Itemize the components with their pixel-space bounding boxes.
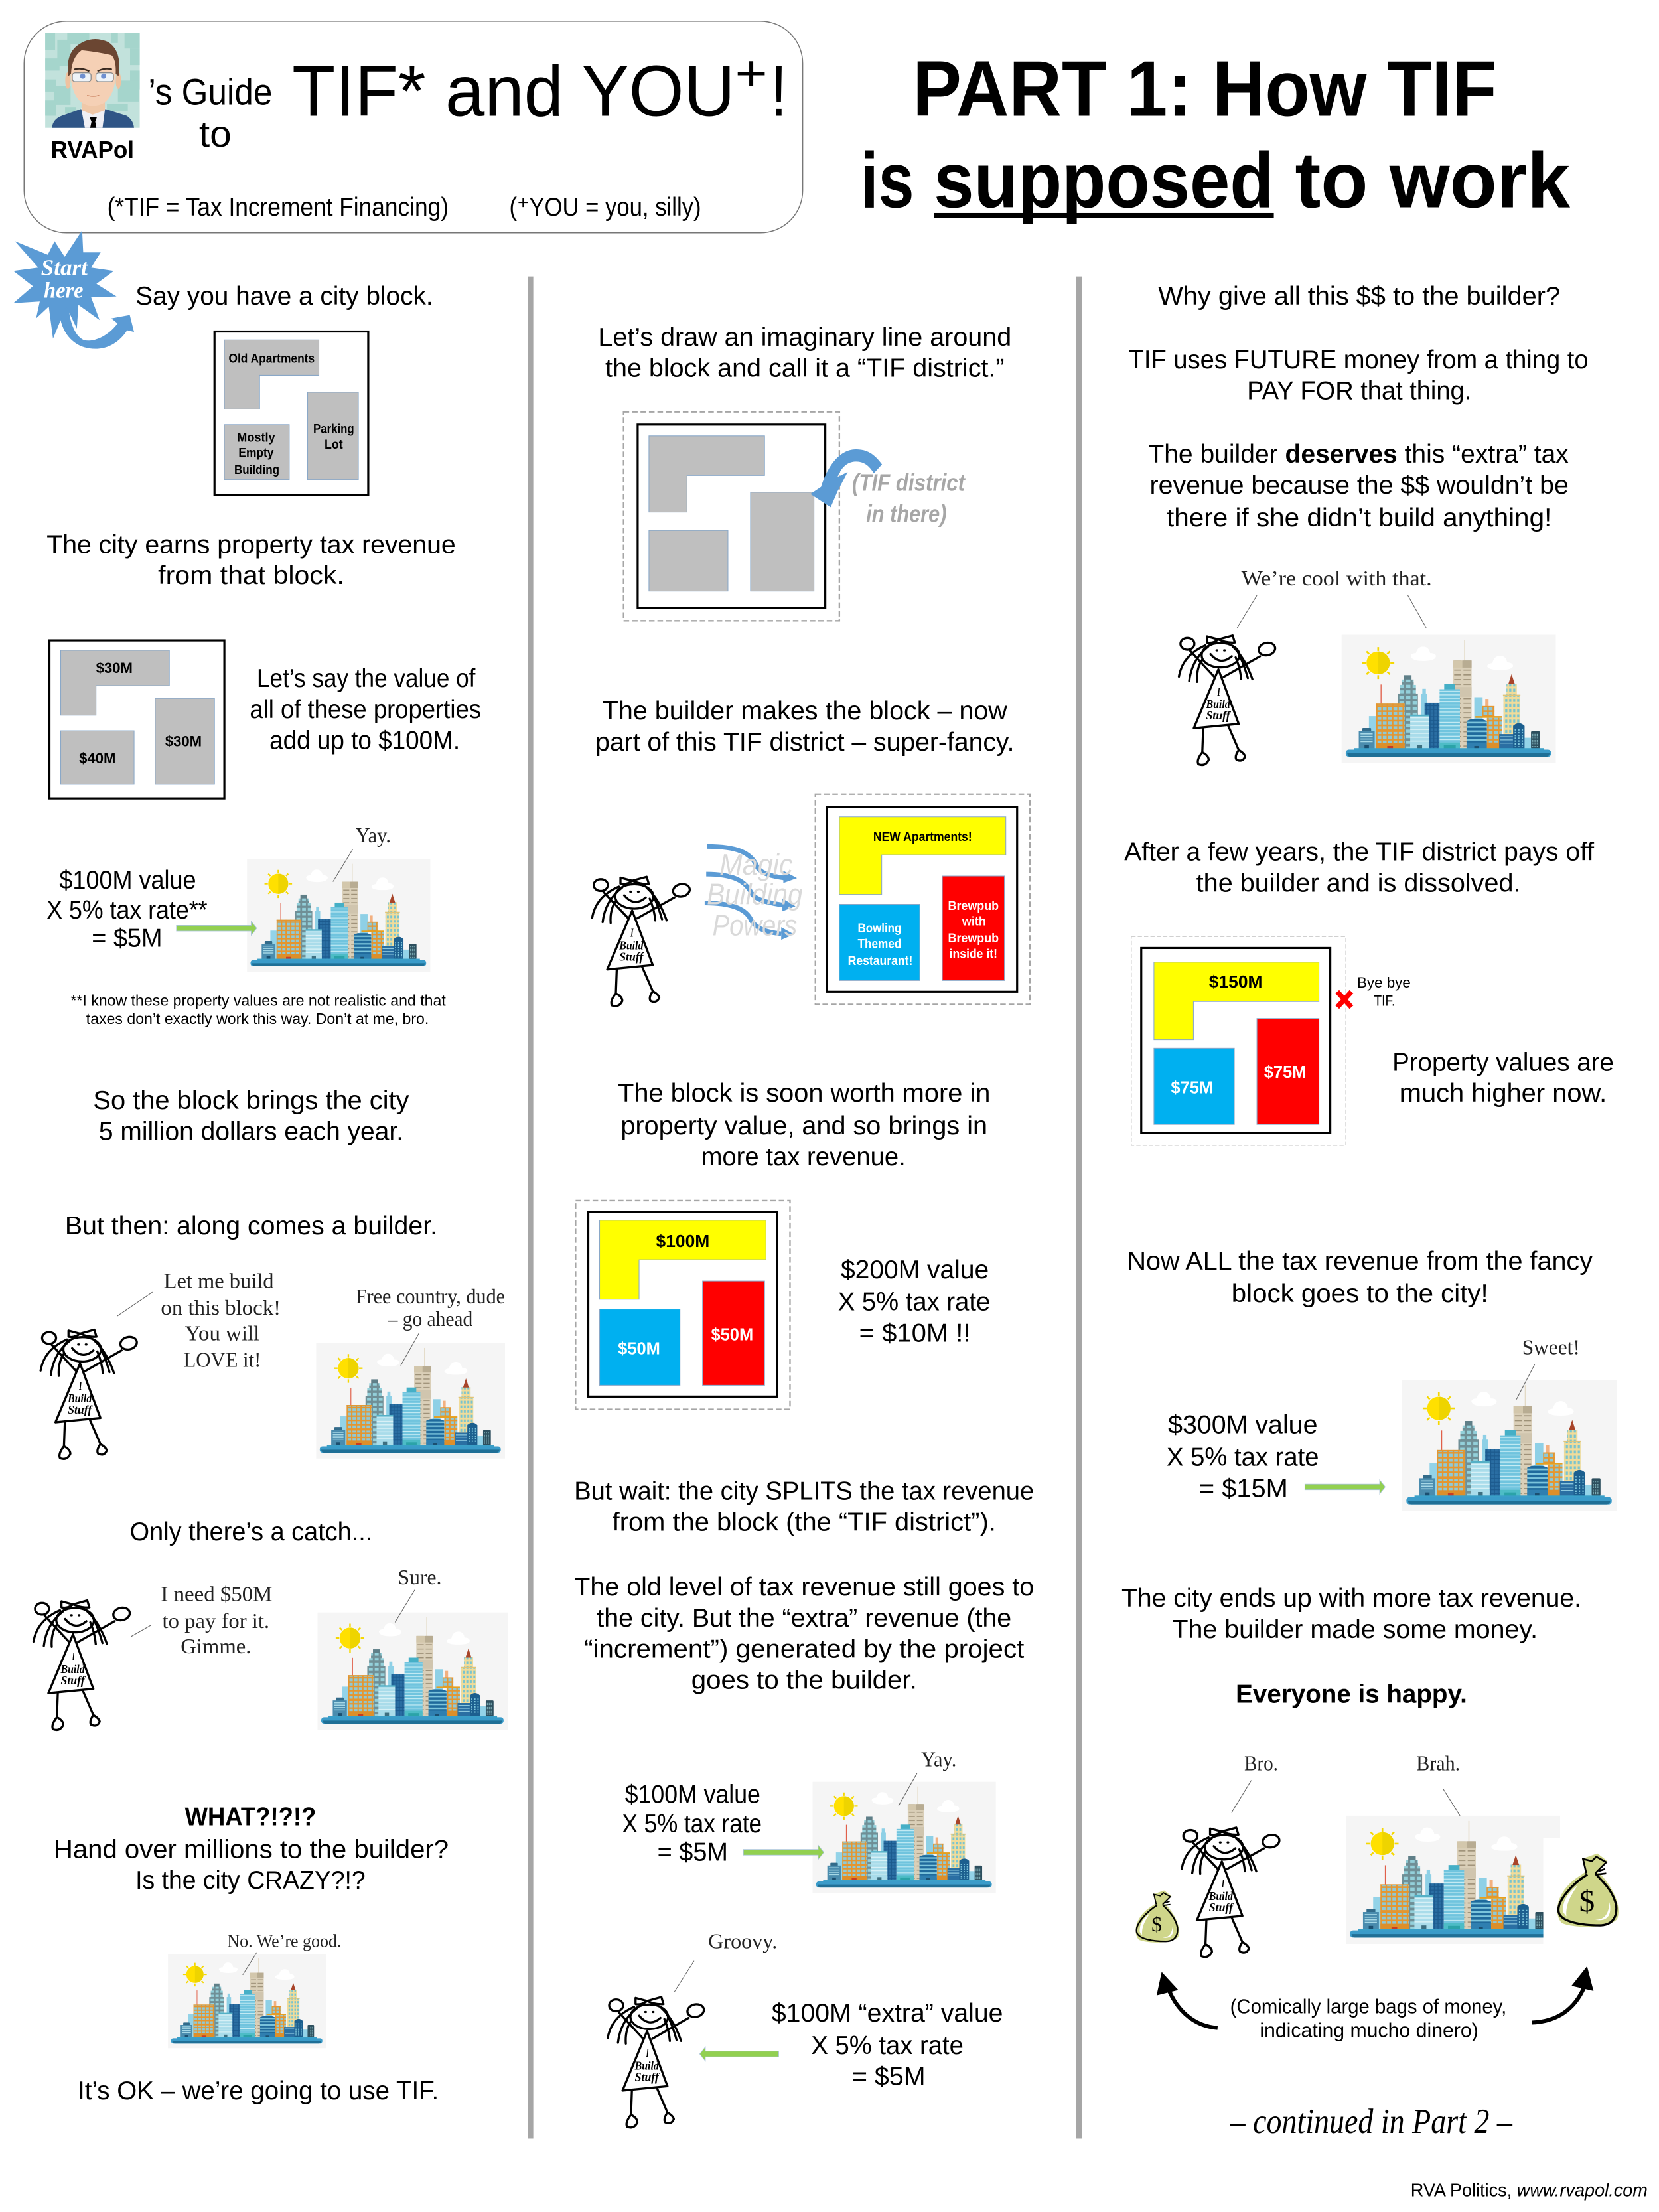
speech pointer: free country <box>401 1333 419 1366</box>
text: worth more: property value, and so brings in <box>620 1111 987 1140</box>
title: Part 1 <box>861 44 1571 224</box>
title: TIF and YOU: ! <box>770 50 787 131</box>
diagram: fancy block: inside it! <box>950 947 997 961</box>
title: Part 1: supposed <box>934 136 1274 224</box>
diagram: block with values <box>50 640 224 798</box>
text: all tax revenue <box>1127 1246 1593 1308</box>
text: super fancy <box>595 696 1014 757</box>
text: deserves: there if she didn’t build anything! <box>1167 503 1551 532</box>
footnote: taxes don’t exactly work this way. Don’t at me, bro. <box>86 1010 429 1027</box>
text: ends up: The city ends up with more tax revenue. <box>1121 1584 1581 1613</box>
diagram: fancy block: NEW Apartments! <box>873 830 972 844</box>
diagram: block with 200M values <box>575 1201 790 1410</box>
icon: city with Yay <box>247 824 430 972</box>
icon: start here starburst: Start <box>41 256 89 280</box>
diagram: labelled city block: Empty <box>238 447 274 461</box>
header panel: title box <box>24 21 803 233</box>
text: higher now: much higher now. <box>1400 1078 1607 1108</box>
text: 5 million <box>93 1086 409 1146</box>
arrow: curved left to small bag <box>1157 1972 1218 2028</box>
text: higher now: Property values are <box>1392 1047 1614 1076</box>
text: pays off: After a few years, the TIF district pays off <box>1124 838 1594 867</box>
text: future money: PAY FOR that thing. <box>1247 376 1471 406</box>
icon: city last <box>1346 1816 1561 1945</box>
text: ends up: The builder made some money. <box>1173 1615 1538 1644</box>
text: calculation 5M: $100M value <box>59 865 196 895</box>
text: calculation 15M: $300M value <box>1168 1410 1317 1439</box>
heading: guide to <box>148 71 272 155</box>
icon: builder 3: I <box>630 926 634 939</box>
text: pays off: the builder and is dissolved. <box>1196 868 1521 897</box>
text: catch: Only there’s a catch... <box>130 1517 372 1546</box>
icon: builder 3: Stuff <box>619 950 644 964</box>
icon: builder 5: I <box>1221 1877 1225 1890</box>
icon: red x <box>1337 992 1351 1007</box>
text: definitions <box>108 192 701 222</box>
text: value adds up: add up to $100M. <box>269 726 460 755</box>
label: TIF district in there <box>852 469 966 527</box>
text: increment explanation: “increment”) generated by the project <box>584 1635 1024 1664</box>
diagram: fancy block <box>816 794 1030 1004</box>
icon: city <box>316 1343 505 1459</box>
text: future money: TIF uses FUTURE money from a thing to <box>1129 345 1589 374</box>
icon: city with Yay: Yay. <box>921 1747 956 1771</box>
icon: large money bag <box>1557 1854 1619 1927</box>
diagram: labelled city block: Parking <box>313 423 354 437</box>
diagram: labelled city block <box>214 332 368 495</box>
diagram: block with values: $40M <box>79 750 115 767</box>
title: TIF and YOU: TIF* and YOU <box>292 50 735 131</box>
text: use tif: It’s OK – we’re going to use TIF. <box>78 2076 439 2105</box>
text: imaginary line <box>598 323 1011 383</box>
arrow: curved right to large bag <box>1532 1966 1593 2023</box>
icon: builder 3 <box>592 877 693 1006</box>
text: calculation 10M: = $10M !! <box>859 1318 971 1347</box>
speech: need 50M: to pay for it. <box>163 1609 269 1633</box>
text: calculation 10M: X 5% tax rate <box>838 1288 990 1317</box>
icon: builder 5: Stuff <box>1209 1901 1234 1914</box>
text: calculation 15M: = $15M <box>1199 1473 1288 1503</box>
diagram: fancy block: Bowling <box>858 922 901 936</box>
icon: builder 1 <box>40 1330 140 1459</box>
text: ends up <box>1121 1584 1581 1644</box>
icon: city with sweet: Sweet! <box>1522 1336 1580 1359</box>
label: TIF district in there: (TIF district <box>852 469 966 496</box>
speech: bro brah: Bro. <box>1244 1752 1278 1775</box>
speech: free country <box>356 1285 505 1331</box>
text: deserves: revenue because the $$ wouldn’t be <box>1150 471 1569 500</box>
text: value adds up: all of these properties <box>250 695 481 724</box>
icon: large money bag: $ <box>1579 1884 1595 1919</box>
title: Part 1: PART 1: How TIF <box>912 44 1496 133</box>
icon: small money bag: $ <box>1151 1913 1162 1936</box>
text: increment explanation <box>574 1572 1034 1694</box>
text: all tax revenue: block goes to the city! <box>1232 1279 1488 1308</box>
diagram: fancy block: with <box>962 915 986 928</box>
diagram: dissolved block <box>1131 936 1346 1145</box>
text: deserves: The builder deserves this “extra” tax <box>1148 439 1569 469</box>
text: calculation 10M: $200M value <box>841 1255 989 1284</box>
diagram: block with 200M values: $50M <box>711 1325 753 1344</box>
label: magic building powers <box>707 849 803 942</box>
text: calculation old level: = $5M <box>658 1838 728 1867</box>
speech: bro brah <box>1232 1752 1465 1822</box>
title: Part 1: is <box>861 136 914 224</box>
icon: builder 5: Build <box>1208 1889 1234 1903</box>
text: increment explanation: The old level of tax revenue still goes to <box>574 1572 1034 1601</box>
text: increment explanation: the city. But the “extra” revenue (the <box>597 1603 1011 1633</box>
text: city splits: from the block (the “TIF district”). <box>613 1507 996 1536</box>
speech: sure: Sure. <box>398 1566 441 1589</box>
speech: cool with that <box>1237 567 1432 628</box>
diagram: fancy block: Restaurant! <box>848 954 912 968</box>
text: future money <box>1129 345 1589 406</box>
icon: builder 4: I <box>1217 685 1220 698</box>
icon: city with Yay <box>812 1747 996 1893</box>
icon: city <box>317 1613 508 1730</box>
icon: builder groovy: I <box>646 2046 650 2059</box>
diagram: fancy block: Brewpub <box>948 932 999 946</box>
text: 5 million: 5 million dollars each year. <box>99 1117 403 1146</box>
label: bye bye TIF: TIF. <box>1374 993 1395 1009</box>
icon: start here starburst: here <box>44 279 84 303</box>
icon: builder 4: Build <box>1206 698 1231 711</box>
text: calculation old level: $100M value <box>625 1780 760 1809</box>
icon: builder 3: Build <box>618 939 644 952</box>
diagram: dissolved block: $75M <box>1171 1078 1213 1097</box>
icon: builder groovy: Build <box>634 2059 660 2072</box>
text: calculation extra: $100M “extra” value <box>772 1998 1003 2028</box>
icon: builder 2: Stuff <box>61 1674 86 1687</box>
text: definitions: (*TIF = Tax Increment Financing) <box>108 192 449 222</box>
text: calculation extra: = $5M <box>852 2062 926 2091</box>
diagram: labelled city block: Old Apartments <box>228 352 315 366</box>
diagram: fancy block: Brewpub <box>948 899 999 913</box>
text: calculation extra <box>772 1998 1003 2091</box>
icon: city with no we're good: No. We’re good. <box>227 1930 342 1951</box>
text: why give: Why give all this $$ to the builder? <box>1158 281 1560 311</box>
diagram: block with 200M values: $100M <box>656 1232 709 1251</box>
text: city splits: But wait: the city SPLITS the tax revenue <box>574 1477 1034 1506</box>
text: what: WHAT?!?!? <box>185 1803 316 1832</box>
icon: builder 4: Stuff <box>1206 709 1232 722</box>
icon: builder 5 <box>1182 1828 1283 1957</box>
text: city earns tax <box>46 530 456 590</box>
icon: city with no we're good <box>168 1930 342 2048</box>
text: 5 million: So the block brings the city <box>93 1086 409 1115</box>
title: TIF and YOU: + <box>735 45 767 102</box>
text: increment explanation: goes to the builder. <box>691 1665 917 1694</box>
arrow: green to builder <box>699 2047 778 2061</box>
text: deserves <box>1148 439 1569 532</box>
speech: builder let me build: LOVE it! <box>183 1349 261 1372</box>
column dividers <box>528 277 1082 2138</box>
speech: builder let me build <box>117 1270 281 1372</box>
credit: RVA Politics, www.rvapol.com <box>1411 2180 1648 2201</box>
text: comically large: (Comically large bags of money, <box>1230 1994 1506 2018</box>
text: higher now <box>1392 1047 1614 1108</box>
text: worth more: The block is soon worth more in <box>618 1078 990 1108</box>
arrow: green to city <box>1305 1480 1386 1494</box>
icon: builder groovy <box>608 1930 777 2128</box>
text: all tax revenue: Now ALL the tax revenue from the fancy <box>1127 1246 1593 1276</box>
speech: free country: – go ahead <box>388 1307 472 1331</box>
text: what: Is the city CRAZY?!? <box>135 1866 366 1895</box>
text: builder arrives: But then: along comes a builder. <box>65 1211 437 1240</box>
text: calculation old level <box>622 1780 762 1867</box>
diagram: labelled city block: Mostly <box>237 431 275 445</box>
text: calculation 15M <box>1167 1410 1319 1503</box>
label: magic building powers: Powers <box>713 909 797 942</box>
diagram: labelled city block: Building <box>234 463 279 477</box>
icon: start here starburst <box>13 230 134 349</box>
arrow: green to city <box>177 921 257 935</box>
text: worth more <box>618 1078 990 1171</box>
text: calculation 5M: X 5% tax rate** <box>46 895 208 924</box>
heading: guide to: to <box>199 113 232 155</box>
icon: builder 2 <box>34 1601 133 1730</box>
text: what <box>54 1803 449 1895</box>
label: magic building powers: Magic <box>719 849 793 881</box>
text: calculation 15M: X 5% tax rate <box>1167 1443 1319 1472</box>
text: continued: – continued in Part 2 – <box>1230 2102 1512 2141</box>
icon: builder groovy: Groovy. <box>708 1930 777 1953</box>
text: city earns tax: The city earns property tax revenue <box>46 530 456 559</box>
diagram: block with values: $30M <box>96 660 133 676</box>
footnote <box>70 992 446 1027</box>
icon: builder 1: I <box>79 1379 82 1392</box>
icon: builder 4 <box>1179 636 1278 765</box>
arrow: green to city <box>743 1845 824 1860</box>
text: imaginary line: Let’s draw an imaginary line around <box>598 323 1011 352</box>
speech: cool with that: We’re cool with that. <box>1242 567 1432 590</box>
title: Part 1: to work <box>1295 136 1571 224</box>
label: bye bye TIF: Bye bye <box>1357 974 1411 991</box>
icon: builder 1: Stuff <box>68 1403 93 1416</box>
speech: need 50M: I need $50M <box>161 1583 272 1606</box>
speech: builder let me build: Let me build <box>164 1270 274 1293</box>
diagram: dissolved block: $150M <box>1209 973 1263 992</box>
icon: builder 2: I <box>72 1650 75 1663</box>
icon: city with Yay: Yay. <box>356 824 391 847</box>
text: what: Hand over millions to the builder? <box>54 1834 449 1864</box>
text: everyone happy: Everyone is happy. <box>1236 1680 1467 1709</box>
icon: builder groovy: Stuff <box>635 2070 660 2083</box>
text: calculation 5M <box>46 865 208 952</box>
diagram: block with 200M values: $50M <box>618 1340 660 1359</box>
diagram: block with values: $30M <box>165 733 202 749</box>
diagram: TIF district block <box>624 412 839 621</box>
icon: builder 1: Build <box>67 1392 92 1405</box>
speech: free country: Free country, dude <box>356 1285 505 1308</box>
icon: city <box>1342 635 1556 763</box>
text: comically large: indicating mucho dinero) <box>1260 2018 1479 2041</box>
speech: bro brah: Brah. <box>1416 1752 1460 1775</box>
text: value adds up: Let’s say the value of <box>257 664 476 693</box>
diagram: dissolved block: $75M <box>1264 1063 1306 1082</box>
text: super fancy: The builder makes the block – now <box>603 696 1007 725</box>
text: pays off <box>1124 838 1594 897</box>
speech: need 50M <box>131 1583 272 1658</box>
text: super fancy: part of this TIF district – super-fancy. <box>595 727 1014 757</box>
label: magic building powers: Building <box>707 879 803 911</box>
text: calculation 10M <box>838 1255 990 1347</box>
text: calculation extra: X 5% tax rate <box>811 2031 964 2060</box>
text: city earns tax: from that block. <box>158 561 344 590</box>
icon: builder 2: Build <box>60 1662 86 1676</box>
label: TIF district in there: in there) <box>866 500 946 527</box>
speech: builder let me build: on this block! <box>161 1296 281 1319</box>
icon: avatar <box>45 33 140 128</box>
text: value adds up <box>250 664 481 755</box>
speech: sure <box>395 1566 441 1622</box>
arrows: magic building powers <box>705 846 797 940</box>
speech: builder let me build: You will <box>185 1321 259 1345</box>
text: say you have a city block: Say you have a city block. <box>135 281 433 311</box>
icon: small money bag <box>1135 1890 1179 1943</box>
text: imaginary line: the block and call it a “TIF district.” <box>605 354 1005 383</box>
text: comically large <box>1230 1994 1506 2041</box>
diagram: labelled city block: Lot <box>325 438 343 452</box>
text: calculation 5M: = $5M <box>92 923 163 952</box>
speech: need 50M: Gimme. <box>180 1635 251 1658</box>
footnote: **I know these property values are not realistic and that <box>70 992 446 1009</box>
text: calculation old level: X 5% tax rate <box>622 1809 762 1838</box>
label: bye bye TIF <box>1357 974 1411 1009</box>
text: city splits <box>574 1477 1034 1536</box>
text: worth more: more tax revenue. <box>701 1142 906 1171</box>
arrow: TIF district pointer <box>810 449 882 507</box>
heading: guide to: ’s Guide <box>148 71 272 112</box>
text: definitions: (⁺YOU = you, silly) <box>509 192 701 222</box>
icon: city with sweet <box>1402 1336 1617 1511</box>
diagram: fancy block: Themed <box>858 937 901 951</box>
heading: RVAPol: RVAPol <box>51 136 134 163</box>
